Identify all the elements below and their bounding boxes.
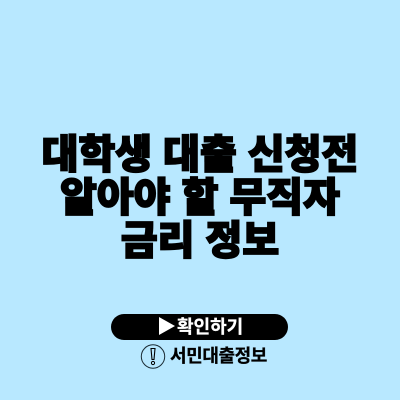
- title: [42, 133, 358, 263]
- brand name: 서민대출정보: [170, 346, 267, 366]
- button label: 확인하기: [177, 317, 243, 337]
- icon: exclamation in circle: [140, 344, 166, 369]
- title: 대학생 대출 신청전: [42, 133, 358, 177]
- title: 금리 정보: [121, 219, 279, 263]
- icon: play triangle: [159, 317, 175, 335]
- title: 알아야 할 무직자: [60, 176, 340, 220]
- button: confirm: [111, 314, 288, 340]
